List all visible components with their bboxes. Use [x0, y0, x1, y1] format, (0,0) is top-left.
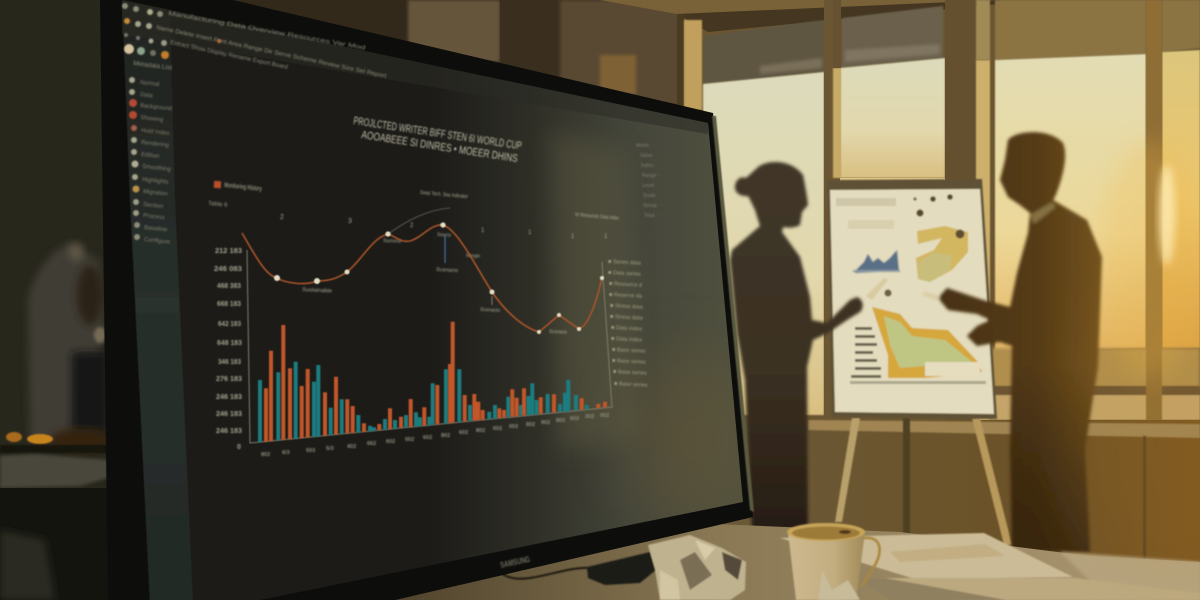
monitor brand label: SAMSUNG — [500, 555, 531, 570]
right side legend: ■ Base series — [614, 381, 648, 389]
upper chart annotations: 2 — [410, 223, 414, 229]
x axis labels: 662 — [367, 441, 376, 447]
y axis labels: 246 183 — [216, 394, 242, 401]
faint panel at screen right: Value · · — [640, 153, 659, 159]
warm sunlight overlay — [1080, 250, 1200, 590]
menu labels — [156, 11, 387, 80]
x axis labels: 602 — [423, 435, 432, 441]
right side legend: ■ Stress data — [610, 314, 644, 322]
monitor screen — [122, 0, 760, 600]
chart title: AOOABEEE SI DINRES • MOEER DHINS — [361, 129, 519, 165]
flip chart board with maps — [827, 179, 997, 419]
sidebar list: Edition — [141, 152, 160, 160]
x axis labels: 602 — [570, 416, 579, 422]
upper chart annotations: Scenario — [436, 267, 458, 274]
x axis labels: 602 — [459, 430, 468, 436]
x axis labels: 802 — [526, 422, 535, 428]
sidebar list: Data — [140, 92, 154, 99]
sidebar list: Rendering — [141, 140, 169, 149]
x axis labels: 802 — [261, 452, 270, 458]
sidebar list: Configure — [144, 237, 171, 246]
line series with markers — [242, 208, 604, 334]
y axis labels: 468 383 — [217, 283, 241, 290]
upper chart annotations: Scenario — [549, 329, 567, 336]
upper chart annotations: 2 — [280, 214, 284, 221]
y axis labels: 346 183 — [218, 359, 241, 366]
x axis labels — [261, 413, 609, 458]
upper chart annotations: 1 — [481, 228, 485, 234]
sidebar list — [129, 77, 172, 246]
sidebar list: Section — [143, 202, 163, 210]
chart legend: Monitoring History — [224, 182, 262, 193]
board map lower — [872, 307, 982, 378]
sidebar list: Baseline — [144, 225, 168, 233]
monitor stand and cables — [500, 552, 656, 585]
flip chart easel legs — [835, 418, 1012, 545]
x axis labels: 402 — [347, 444, 356, 450]
right side legend: ■ Base series — [612, 358, 646, 366]
y axis labels: 668 183 — [217, 301, 241, 308]
y axis labels — [214, 248, 242, 451]
upper chart annotations: Margin — [466, 253, 480, 260]
toolbar icons — [122, 3, 221, 59]
chart legend — [208, 181, 262, 209]
upper chart annotations: Summit — [383, 238, 402, 245]
right side legend: ■ Data index — [611, 325, 643, 333]
blurred colleague at left — [0, 243, 110, 600]
x axis labels: 6/3 — [282, 450, 290, 456]
person: woman silhouette — [730, 162, 863, 530]
coffee cup — [787, 523, 880, 600]
x axis labels: 5/3 — [326, 446, 334, 452]
right side legend: ■ Base series — [613, 369, 647, 377]
y axis labels: 212 183 — [215, 248, 242, 255]
right side legend: ■ Data series — [608, 270, 641, 278]
sidebar list: Showing — [140, 115, 163, 123]
person: man silhouette — [922, 132, 1102, 552]
sidebar list: Smoothing — [142, 164, 171, 173]
y axis labels: 642 183 — [218, 321, 241, 328]
upper chart annotations: Scenario — [480, 307, 500, 314]
faint panel at screen right — [636, 143, 663, 219]
y axis labels: 276 183 — [216, 376, 242, 383]
y axis labels: 246 183 — [216, 428, 242, 435]
sidebar list: Normal — [140, 80, 160, 88]
upper chart annotations: 1 — [604, 234, 608, 240]
sidebar panel — [122, 0, 708, 600]
x axis labels: 602 — [386, 439, 395, 445]
right side legend: ■ Stress data — [610, 303, 644, 311]
x axis labels: 002 — [600, 413, 609, 419]
right side legend: ■ Reserve da — [609, 292, 643, 300]
sidebar list: Migration — [143, 189, 168, 198]
menu labels: Manufacturing Data Overview Resources Var Mod — [168, 11, 366, 52]
y axis labels: 246 183 — [216, 411, 242, 418]
desk surface — [395, 524, 1200, 600]
menu labels: Extract Show Display Rename Export Board — [170, 40, 288, 71]
faint panel at screen right: Scale · · — [643, 193, 662, 199]
x axis labels: 302 — [585, 414, 594, 420]
y axis labels: 0 — [237, 444, 241, 451]
board chart — [853, 250, 900, 273]
board legend — [851, 327, 881, 378]
faint panel at screen right: Metric · · — [636, 143, 656, 149]
faint panel at screen right: Total · · — [644, 213, 661, 219]
sidebar title: Metadata List — [133, 60, 173, 72]
x axis labels: 503 — [306, 448, 315, 454]
chart legend: Table 6 — [208, 201, 228, 209]
right side legend: ■ Resource d — [609, 281, 642, 289]
faint panel at screen right: Index · · — [641, 163, 660, 169]
sidebar list: Highlights — [142, 177, 169, 186]
faint panel at screen right: Range · · — [642, 173, 663, 179]
bar series: teal — [260, 362, 587, 442]
upper chart annotations — [280, 190, 619, 336]
lower wall and window sill — [690, 420, 1200, 566]
right side legend: ■ Data index — [611, 336, 643, 344]
x axis labels: 002 — [405, 437, 414, 443]
newspaper stack — [780, 533, 1200, 600]
upper chart annotations: 1 — [528, 230, 532, 236]
right side legend — [608, 259, 648, 389]
x axis labels: 902 — [541, 420, 550, 426]
x axis labels: 802 — [476, 428, 485, 434]
upper chart annotations: Deep Tech. Sea Indicator — [420, 190, 468, 200]
chart axes — [247, 250, 613, 443]
sidebar list: Background — [140, 103, 172, 112]
y axis labels: 648 183 — [217, 340, 242, 347]
upper chart annotations: Nr Resources Data Index — [575, 212, 619, 222]
monitor bezel — [100, 0, 754, 600]
faint panel at screen right: Group · · — [643, 203, 663, 209]
crumpled paper — [648, 535, 746, 600]
sidebar list: Hold Index — [141, 128, 170, 137]
upper chart annotations: Sustainable — [302, 287, 332, 295]
upper chart annotations: 1 — [571, 234, 575, 240]
bar series: orange — [266, 322, 605, 442]
upper chart annotations: Source — [437, 232, 451, 239]
menu labels: Name Delete Insert Font Area Range Dir Serve Scheme Review Size Sel Report — [156, 25, 387, 80]
right side legend: ■ Base series — [612, 347, 646, 355]
x axis labels: 602 — [493, 426, 502, 432]
glare wash on screen right — [549, 135, 725, 502]
chart title: PROJLCTED WRITER BIFF STEN 6I WORLD CUP — [353, 115, 522, 152]
board map upper — [916, 226, 968, 282]
chart title — [353, 115, 522, 165]
upper chart annotations: 3 — [348, 218, 352, 225]
crumpled paper near cup — [818, 570, 860, 600]
y axis labels: 246 083 — [214, 266, 242, 273]
sidebar list: Process — [143, 213, 165, 221]
windows with sunset sky — [600, 0, 1200, 440]
x axis labels: 002 — [509, 424, 518, 430]
x axis labels: 802 — [556, 418, 565, 424]
x axis labels: 802 — [441, 433, 450, 439]
right side legend: ■ Series data — [608, 259, 642, 267]
faint panel at screen right: Level · · — [642, 183, 660, 189]
